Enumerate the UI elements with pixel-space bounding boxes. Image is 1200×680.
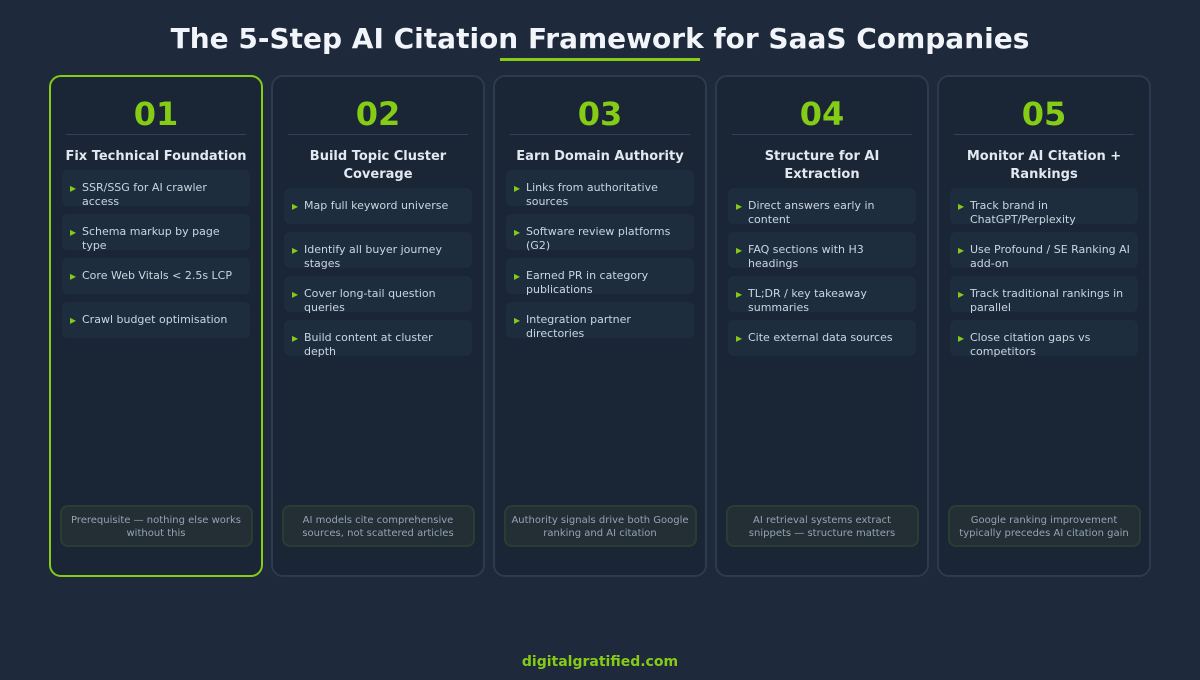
item: schema markup	[62, 214, 250, 250]
step number 04: 04	[800, 95, 844, 133]
note: step 04	[726, 505, 918, 547]
item: authoritative links: Links from authoritative sources	[526, 181, 658, 208]
item: direct answers: Direct answers early in content	[748, 199, 875, 226]
item: traditional rankings: Track traditional rankings in parallel	[970, 287, 1123, 314]
panel: step 03	[493, 75, 707, 577]
heading: step 02: Build Topic Cluster Coverage	[310, 149, 446, 182]
item: buyer journey	[284, 232, 472, 268]
item: long-tail queries: ▸	[292, 287, 298, 301]
item: schema markup: Schema markup by page type	[82, 225, 220, 252]
note: step 03: Authority signals drive both Google ranking and AI citation	[511, 515, 689, 539]
item: core web vitals: Core Web Vitals < 2.5s LCP	[82, 269, 232, 282]
item: earned PR	[506, 258, 694, 294]
item: partner directories: Integration partner directories	[526, 313, 631, 340]
item: long-tail queries: Cover long-tail question queries	[304, 287, 436, 314]
note: step 01: Prerequisite — nothing else works without this	[71, 515, 241, 539]
item: FAQ sections	[728, 232, 916, 268]
item: cluster depth: ▸	[292, 331, 298, 345]
item: external data: Cite external data sources	[748, 331, 893, 344]
item: buyer journey: ▸	[292, 243, 298, 257]
panel: step 04	[715, 75, 929, 577]
item: crawl budget: Crawl budget optimisation	[82, 313, 227, 326]
note: step 04: AI retrieval systems extract snippets — structure matters	[749, 515, 895, 539]
item: authoritative links	[506, 170, 694, 206]
item: core web vitals: ▸	[70, 269, 76, 283]
item: crawl budget	[62, 302, 250, 338]
item: schema markup: ▸	[70, 225, 76, 239]
step number 05: 05	[1022, 95, 1066, 133]
item: partner directories: ▸	[514, 313, 520, 327]
item: partner directories	[506, 302, 694, 338]
item: TL;DR summaries	[728, 276, 916, 312]
item: external data: ▸	[736, 331, 742, 345]
heading: step 01: Fix Technical Foundation	[65, 149, 247, 164]
item: review platforms: Software review platforms (G2)	[526, 225, 670, 252]
title: The 5-Step AI Citation Framework for SaaS Companies	[171, 22, 1029, 55]
note: step 02: AI models cite comprehensive sources, not scattered articles	[302, 515, 454, 539]
step number 01: 01	[134, 95, 178, 133]
item: AI add-on: Use Profound / SE Ranking AI add-on	[970, 243, 1130, 270]
note: step 01	[60, 505, 252, 547]
item: direct answers: ▸	[736, 199, 742, 213]
brand footer: digitalgratified.com	[522, 654, 678, 670]
title underline	[500, 58, 700, 61]
item: review platforms: ▸	[514, 225, 520, 239]
item: long-tail queries	[284, 276, 472, 312]
item: citation gaps	[950, 320, 1138, 356]
step number 02: 02	[356, 95, 400, 133]
item: keyword universe: ▸	[292, 199, 298, 213]
item: citation gaps: ▸	[958, 331, 964, 345]
item: crawler access	[62, 170, 250, 206]
item: track brand: Track brand in ChatGPT/Perplexity	[970, 199, 1076, 226]
panel: step 01	[49, 75, 263, 577]
heading: step 05: Monitor AI Citation + Rankings	[967, 149, 1121, 182]
item: citation gaps: Close citation gaps vs competitors	[970, 331, 1090, 358]
note: step 05	[948, 505, 1140, 547]
item: earned PR: Earned PR in category publications	[526, 269, 648, 296]
item: crawler access: SSR/SSG for AI crawler access	[82, 181, 207, 208]
item: track brand: ▸	[958, 199, 964, 213]
step number 03: 03	[578, 95, 622, 133]
item: traditional rankings	[950, 276, 1138, 312]
item: track brand	[950, 188, 1138, 224]
panel: step 05	[937, 75, 1151, 577]
item: crawler access: ▸	[70, 181, 76, 195]
item: keyword universe: Map full keyword universe	[304, 199, 448, 212]
heading: step 04: Structure for AI Extraction	[765, 149, 879, 182]
item: TL;DR summaries: TL;DR / key takeaway summaries	[748, 287, 867, 314]
item: AI add-on	[950, 232, 1138, 268]
item: AI add-on: ▸	[958, 243, 964, 257]
item: direct answers	[728, 188, 916, 224]
item: authoritative links: ▸	[514, 181, 520, 195]
item: review platforms	[506, 214, 694, 250]
item: cluster depth	[284, 320, 472, 356]
item: crawl budget: ▸	[70, 313, 76, 327]
item: keyword universe	[284, 188, 472, 224]
heading: step 03: Earn Domain Authority	[516, 149, 684, 164]
note: step 03	[504, 505, 696, 547]
item: traditional rankings: ▸	[958, 287, 964, 301]
item: FAQ sections: FAQ sections with H3 headings	[748, 243, 864, 270]
note: step 05: Google ranking improvement typically precedes AI citation gain	[959, 515, 1129, 539]
item: FAQ sections: ▸	[736, 243, 742, 257]
item: core web vitals	[62, 258, 250, 294]
item: TL;DR summaries: ▸	[736, 287, 742, 301]
item: buyer journey: Identify all buyer journey stages	[304, 243, 442, 270]
item: cluster depth: Build content at cluster depth	[304, 331, 433, 358]
panel: step 02	[271, 75, 485, 577]
item: external data	[728, 320, 916, 356]
note: step 02	[282, 505, 474, 547]
item: earned PR: ▸	[514, 269, 520, 283]
